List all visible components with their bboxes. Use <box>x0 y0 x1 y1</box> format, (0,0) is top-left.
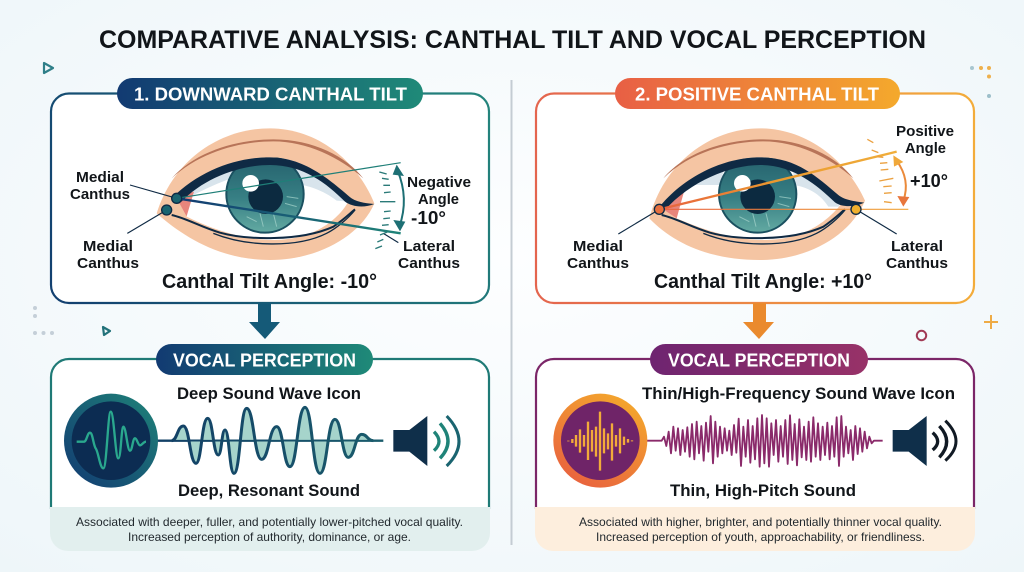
label: plus ten degrees: +10° <box>910 171 948 191</box>
eye diagram: downward tilt <box>127 128 405 260</box>
canthus leader lines and dots <box>618 204 897 234</box>
icon: deep wave circle <box>64 394 158 488</box>
label: deep resonant sound: Deep, Resonant Sound <box>178 481 360 500</box>
heading pill: positive canthal tilt <box>615 78 900 109</box>
label: medial canthus: Medial <box>573 238 623 255</box>
description box: deep: Increased perception of authority, dominance, or age. <box>128 530 411 544</box>
description box: deep: Associated with deeper, fuller, and potentially lower-pitched vocal quality. <box>76 515 463 529</box>
icon: speaker <box>893 416 956 466</box>
arrow: right panel down <box>743 303 774 339</box>
label: medial canthus lower: Canthus <box>77 255 139 272</box>
heading pill: vocal perception: VOCAL PERCEPTION <box>668 350 850 370</box>
label: thin high-frequency sound wave icon: Thin/High-Frequency Sound Wave Icon <box>642 384 955 403</box>
label: thin high-pitch sound: Thin, High-Pitch Sound <box>670 481 856 500</box>
panel: positive canthal tilt <box>536 78 974 303</box>
label: lateral canthus: Lateral <box>403 238 455 255</box>
description box: thin: Increased perception of youth, approachability, or friendliness. <box>596 530 925 544</box>
eye diagram: positive tilt <box>618 128 909 260</box>
arrow: left panel down <box>249 303 280 339</box>
title: COMPARATIVE ANALYSIS: CANTHAL TILT AND VOCAL PERCEPTION <box>99 26 926 54</box>
heading pill: positive canthal tilt: 2. POSITIVE CANTHAL TILT <box>635 84 880 104</box>
description box: thin: Associated with higher, brighter, and potentially thinner vocal quality. <box>579 515 942 529</box>
angle scale ticks <box>867 139 893 203</box>
label: lateral canthus <box>886 238 948 272</box>
label: medial canthus <box>567 238 629 272</box>
label: deep sound wave icon: Deep Sound Wave Icon <box>177 384 361 403</box>
heading pill: vocal perception <box>650 344 868 375</box>
label: lateral canthus <box>398 238 460 272</box>
center divider <box>510 80 512 545</box>
label: medial canthus: Canthus <box>567 255 629 272</box>
label: negative angle: Negative <box>407 174 471 191</box>
tilt lines <box>659 152 908 209</box>
icon: thin wave circle <box>553 394 647 488</box>
label: negative angle <box>407 174 471 228</box>
heading pill: vocal perception <box>156 344 373 375</box>
sound wave graphic: thin <box>647 415 883 467</box>
canthal tilt angle -10: Canthal Tilt Angle: -10° <box>162 271 377 293</box>
panel: downward canthal tilt <box>51 78 489 303</box>
label: positive angle: Positive <box>896 123 954 140</box>
panel: vocal perception deep <box>50 344 490 551</box>
heading pill: vocal perception: VOCAL PERCEPTION <box>173 350 356 370</box>
heading pill: downward canthal tilt <box>117 78 423 109</box>
canthal tilt angle +10: Canthal Tilt Angle: +10° <box>654 271 872 293</box>
sound wave graphic: deep <box>157 407 383 473</box>
label: medial canthus lower <box>77 238 139 272</box>
description box: thin <box>535 507 975 551</box>
label: positive angle: Angle <box>905 140 946 157</box>
angle arrow <box>393 165 405 231</box>
description box: deep <box>50 507 490 551</box>
label: medial canthus upper <box>70 169 130 203</box>
decorative accents <box>33 63 998 340</box>
label: lateral canthus: Lateral <box>891 238 943 255</box>
label: positive angle <box>896 123 954 157</box>
canthus leader lines and dots <box>127 185 398 243</box>
tilt lines <box>177 163 401 233</box>
angle scale ticks <box>375 172 395 249</box>
label: medial canthus lower: Medial <box>83 238 133 255</box>
label: medial canthus upper: Medial <box>76 169 124 186</box>
angle arrow <box>893 155 909 207</box>
label: negative angle: -10° <box>411 208 446 228</box>
label: lateral canthus: Canthus <box>886 255 948 272</box>
panel: vocal perception thin <box>535 344 975 551</box>
label: lateral canthus: Canthus <box>398 255 460 272</box>
label: medial canthus upper: Canthus <box>70 186 130 203</box>
icon: speaker <box>393 416 459 466</box>
label: negative angle: Angle <box>418 191 459 208</box>
heading pill: downward canthal tilt: 1. DOWNWARD CANTHAL TILT <box>134 84 408 104</box>
